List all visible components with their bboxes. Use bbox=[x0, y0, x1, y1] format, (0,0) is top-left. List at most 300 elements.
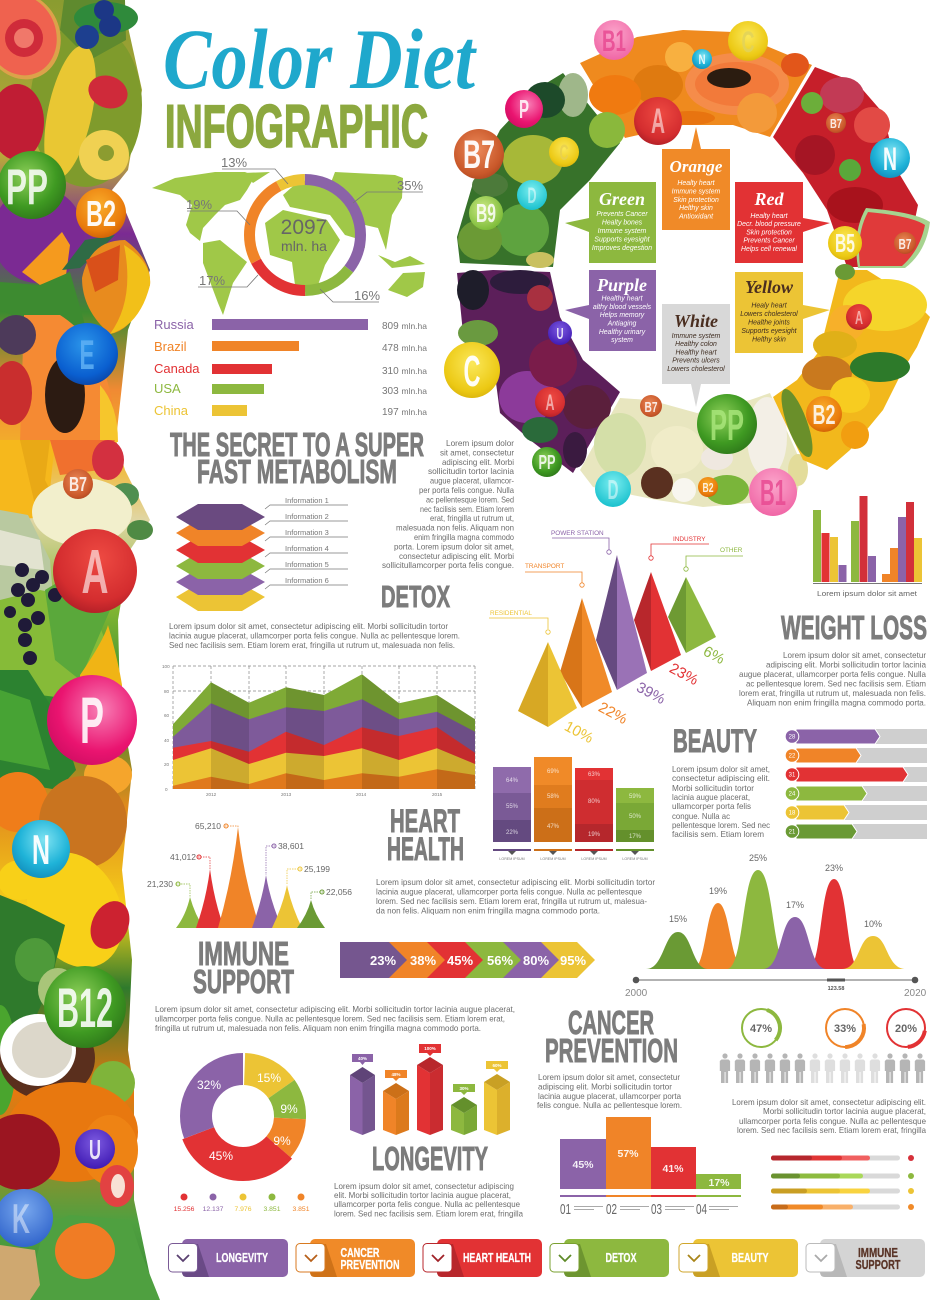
panel: yellow benefits: Helthy skin bbox=[752, 336, 786, 344]
triangle peak chart: 21,230 bbox=[147, 879, 173, 889]
heading: secret to fast metabolism: THE SECRET TO A SUPER bbox=[170, 426, 424, 463]
text block: weight loss: Aliquam non enim fringilla magna commodo porta. bbox=[747, 698, 926, 708]
text block: beauty: lacinia augue placerat, bbox=[672, 793, 750, 802]
text block: metabolism: sollicitudin tortor lacinia bbox=[428, 467, 514, 476]
beauty progress arrows: 28 bbox=[789, 734, 796, 740]
text block: longevity: elit. Morbi sollicitudin tortor lacinia augue placerat, bbox=[334, 1191, 511, 1200]
segmented progress bars bbox=[771, 1155, 914, 1210]
stacked bar chart: 19% bbox=[588, 832, 601, 838]
panel: purple benefits bbox=[565, 270, 656, 351]
triangle peak chart: 38,601 bbox=[278, 841, 304, 851]
area chart: 20 bbox=[164, 762, 170, 767]
vitamin U: U bbox=[89, 1134, 101, 1165]
world map with land ring: 2097 bbox=[281, 216, 327, 239]
panel: green benefits: Healty bones bbox=[602, 220, 643, 226]
text block: beauty: congue. Nulla ac bbox=[672, 812, 730, 821]
panel: yellow benefits bbox=[735, 272, 830, 353]
text block: cancer prevention: felis congue. Nulla ac pellentesque lorem. bbox=[537, 1101, 682, 1110]
vitamin balls on wheel bbox=[444, 20, 916, 516]
stacked bar chart: LOREM IPSUM bbox=[622, 857, 648, 861]
percent circles bbox=[737, 1004, 928, 1052]
panel: purple benefits: Healthy urinary bbox=[599, 329, 646, 336]
left fruit border bbox=[0, 0, 160, 1300]
step bar chart: 01 bbox=[560, 1201, 571, 1218]
donut chart: 9% bbox=[280, 1102, 298, 1116]
small column chart bbox=[813, 496, 922, 598]
land share ring bbox=[250, 180, 360, 290]
panel: orange benefits bbox=[662, 127, 730, 230]
isometric column chart: 40% bbox=[358, 1056, 367, 1061]
button: heart health: HEART HEALTH bbox=[463, 1251, 531, 1265]
panel: green benefits: Improves degestion bbox=[592, 245, 652, 252]
stacked bar chart: 63% bbox=[588, 772, 601, 778]
pyramid chart bbox=[489, 530, 743, 747]
bell curve chart: 25% bbox=[749, 853, 767, 863]
panel: yellow benefits: Supports eyesight bbox=[741, 328, 798, 335]
vitamin P: P bbox=[80, 683, 104, 757]
text block: heart health bbox=[376, 878, 655, 916]
text block: metabolism: enim fringilla magna commodo bbox=[414, 533, 514, 542]
panel: purple benefits: althy blood vessels bbox=[593, 304, 652, 311]
text block: detox: Lorem ipsum dolor sit amet, consectetur adipiscing elit. Morbi sollicitudin tortor bbox=[169, 622, 448, 631]
country bar chart: 809 mln.ha bbox=[382, 321, 427, 332]
text block: longevity: lorem. Sed nec facilisis sem. Etiam lorem erat, fringilla bbox=[334, 1210, 523, 1218]
text block: beauty: Morbi sollicitudin tortor bbox=[672, 784, 754, 793]
triangle peak chart: 41,012 bbox=[170, 852, 196, 862]
panel: red benefits bbox=[735, 182, 830, 263]
text block: people: Morbi sollicitudin tortor lacinia augue placerat, bbox=[763, 1107, 926, 1116]
text block: metabolism: consectetur adipiscing elit. Morbi bbox=[399, 552, 514, 561]
text block: cancer prevention: adipiscing elit. Morbi sollicitudin tortor bbox=[538, 1082, 672, 1092]
map continents bbox=[152, 172, 425, 315]
button: immune support bbox=[806, 1239, 925, 1277]
bell curve chart: 17% bbox=[786, 900, 804, 910]
vitamin A bbox=[53, 529, 137, 613]
text block: immune support: Lorem ipsum dolor sit amet, consectetur adipiscing elit. Morbi sollicitudin tortor lacinia augue placerat, bbox=[155, 1005, 515, 1014]
text block: longevity: Lorem ipsum dolor sit amet, consectetur adipiscing bbox=[334, 1182, 514, 1191]
panel: red benefits: Red bbox=[754, 189, 784, 209]
panel: yellow benefits: Healthe joints bbox=[748, 320, 790, 326]
triangle peak chart bbox=[147, 821, 352, 928]
world map with land ring: 16% bbox=[354, 288, 380, 303]
vitamin balls on wheel: A bbox=[651, 102, 665, 141]
panel: yellow benefits: Healy heart bbox=[751, 302, 788, 310]
panel: white benefits: Lowers cholesterol bbox=[667, 366, 725, 373]
panel: yellow benefits: Yellow bbox=[745, 277, 794, 297]
beauty progress arrows: 24 bbox=[789, 792, 796, 798]
step bar chart bbox=[560, 1117, 741, 1218]
vitamin P bbox=[47, 675, 137, 765]
panel: red benefits: Healty heart bbox=[750, 213, 789, 220]
pyramid chart: 39% bbox=[634, 679, 668, 708]
heading: cancer prevention: PREVENTION bbox=[545, 1032, 678, 1069]
sector: red foods bbox=[773, 67, 930, 268]
isometric column chart: 100% bbox=[424, 1046, 436, 1051]
area chart: 2014 bbox=[356, 792, 367, 797]
vitamin balls on wheel: B7 bbox=[898, 236, 912, 253]
bell curve chart: 23% bbox=[825, 863, 843, 873]
sector: purple foods bbox=[457, 270, 620, 473]
vitamin balls on wheel: PP bbox=[538, 452, 556, 474]
percentage arrow band bbox=[340, 942, 595, 978]
pyramid chart: RESIDENTIAL bbox=[490, 610, 532, 617]
vitamin balls on wheel: D bbox=[608, 474, 618, 505]
sector: orange foods bbox=[580, 30, 812, 138]
text block: immune support bbox=[155, 1005, 515, 1033]
text block: longevity: ullamcorper porta felis congue. Nulla ac pellentesque bbox=[334, 1200, 520, 1209]
country bar chart: 310 mln.ha bbox=[382, 366, 427, 377]
text block: heart health: lacinia augue placerat, ullamcorper porta felis congue. Nulla ac pellentesque bbox=[376, 888, 642, 896]
step bar chart: 57% bbox=[617, 1148, 639, 1160]
layered hexagon stack: Information 3 bbox=[285, 528, 329, 537]
panel: orange benefits: Helthy skin bbox=[679, 205, 713, 212]
vitamin B12: B12 bbox=[57, 976, 113, 1039]
donut chart bbox=[174, 1068, 310, 1213]
panel: red benefits: Skin protection bbox=[746, 230, 792, 236]
heading: cancer prevention bbox=[545, 1004, 678, 1069]
pyramid chart: INDUSTRY bbox=[673, 536, 706, 543]
text block: heart health: Lorem ipsum dolor sit amet, consectetur adipiscing elit. Morbi sollicitudin tortor bbox=[376, 878, 655, 887]
heading: secret to fast metabolism bbox=[170, 426, 424, 490]
vitamin A: A bbox=[82, 538, 108, 607]
beauty progress arrows bbox=[785, 729, 927, 839]
text block: immune support: fringilla ut rutrum ut, malesuada non felis. Aliquam non enim fringilla magna commodo porta. bbox=[155, 1024, 481, 1033]
vitamin balls on wheel: N bbox=[883, 141, 897, 177]
panel: green benefits: Prevents Cancer bbox=[596, 211, 648, 218]
area chart: 2013 bbox=[281, 792, 292, 797]
panel: purple benefits: Antiaging bbox=[607, 320, 637, 328]
vitamin balls on wheel: B2 bbox=[812, 399, 836, 430]
button: detox: DETOX bbox=[606, 1251, 637, 1265]
donut legend: 7.976 bbox=[234, 1206, 252, 1213]
button: heart health bbox=[423, 1239, 542, 1277]
heading: immune support bbox=[193, 935, 294, 1000]
bell curve chart: 2020 bbox=[904, 988, 927, 999]
vitamin balls on wheel: A bbox=[855, 308, 863, 328]
stacked bar chart: 47% bbox=[547, 824, 560, 830]
panel: orange benefits: Orange bbox=[670, 157, 723, 176]
heading: heart health bbox=[387, 803, 464, 867]
pyramid chart: 10% bbox=[562, 718, 596, 747]
vitamin N bbox=[12, 820, 70, 878]
pyramid callouts bbox=[489, 538, 743, 634]
panel: red benefits: Helps cell renewal bbox=[741, 246, 797, 253]
stacked bar chart bbox=[493, 757, 654, 861]
vitamin balls on wheel: N bbox=[698, 51, 706, 67]
percentage arrow band: 80% bbox=[523, 953, 549, 968]
donut chart: 9% bbox=[273, 1134, 291, 1148]
percentage arrow band: 95% bbox=[560, 953, 586, 968]
area chart: 2015 bbox=[432, 792, 443, 797]
people pictogram row bbox=[720, 1053, 925, 1083]
text block: metabolism: nec facilisis sem. Etiam lorem bbox=[420, 505, 514, 514]
vitamin N: N bbox=[32, 826, 50, 873]
sector: green foods bbox=[457, 73, 625, 268]
text block: beauty bbox=[672, 765, 770, 839]
vitamin balls on wheel: B9 bbox=[476, 198, 496, 228]
stacked bar chart: 55% bbox=[506, 804, 519, 810]
country bar chart bbox=[154, 317, 427, 418]
stacked bar chart: LOREM IPSUM bbox=[581, 857, 607, 861]
text block: metabolism: erat, fringilla ut rutrum ut, bbox=[430, 514, 514, 523]
text block: beauty: Lorem ipsum dolor sit amet, bbox=[672, 765, 770, 774]
panel: white benefits: Immune system bbox=[672, 333, 721, 340]
percent circles: 20% bbox=[895, 1023, 917, 1035]
vitamin B12 bbox=[44, 966, 126, 1048]
donut legend bbox=[174, 1194, 310, 1213]
text block: detox bbox=[169, 622, 460, 650]
layered hexagon stack bbox=[176, 496, 348, 611]
button: cancer prevention bbox=[296, 1239, 415, 1277]
text block: cancer prevention: lacinia augue placerat, ullamcorper porta bbox=[538, 1092, 681, 1101]
vitamin balls on wheel: D bbox=[528, 183, 536, 208]
panel: purple benefits: Healthy heart bbox=[602, 296, 644, 302]
layered hexagon stack: Information 4 bbox=[285, 544, 329, 553]
button: longevity: LONGEVITY bbox=[216, 1251, 268, 1265]
pyramid chart: POWER STATION bbox=[551, 530, 604, 537]
text block: weight loss: adipiscing elit. Morbi sollicitudin tortor lacinia bbox=[766, 660, 926, 670]
button: beauty bbox=[679, 1239, 798, 1277]
step bar chart: 03 bbox=[651, 1201, 662, 1218]
button: cancer prevention: CANCER bbox=[340, 1246, 380, 1260]
step bar chart: 17% bbox=[708, 1177, 730, 1189]
heading: secret to fast metabolism: FAST METABOLISM bbox=[197, 453, 397, 490]
bell curve chart: 15% bbox=[669, 914, 687, 924]
isometric column chart bbox=[350, 1044, 510, 1135]
title: Color Diet bbox=[163, 11, 478, 107]
text block: heart health: da non felis. Aliquam non enim fringilla magna commodo porta. bbox=[376, 906, 600, 916]
vitamin E bbox=[56, 323, 118, 385]
percent circles: 33% bbox=[834, 1023, 856, 1035]
button: detox bbox=[550, 1239, 669, 1277]
text block: weight loss: lorem erat, fringilla ut rutrum ut, malesuada non felis. bbox=[739, 689, 926, 698]
stacked bar chart: 17% bbox=[629, 834, 642, 840]
heading: immune support: IMMUNE bbox=[198, 935, 289, 972]
percentage arrow band: 45% bbox=[447, 953, 473, 968]
text block: beauty: pellentesque lorem. Sed nec bbox=[672, 821, 770, 830]
text block: metabolism: porta. Lorem ipsum dolor sit amet, bbox=[394, 542, 514, 551]
button: cancer prevention: PREVENTION bbox=[340, 1258, 400, 1272]
triangle peak chart: 65,210 bbox=[195, 821, 221, 831]
text block: people bbox=[732, 1098, 926, 1135]
area chart: 80 bbox=[164, 689, 170, 694]
panel: orange benefits: Skin protection bbox=[673, 197, 719, 204]
bell curve chart: 123.58 bbox=[828, 986, 844, 992]
vitamin balls on wheel: B1 bbox=[602, 25, 626, 58]
stacked bar chart: 58% bbox=[547, 794, 560, 800]
donut legend: 12.137 bbox=[203, 1206, 224, 1213]
country bar chart: 197 mln.ha bbox=[382, 407, 427, 418]
vitamin PP bbox=[0, 151, 66, 219]
vitamin balls on wheel: C bbox=[560, 140, 569, 165]
text block: people: Lorem ipsum dolor sit amet, consectetur adipiscing elit. bbox=[732, 1098, 926, 1107]
beauty progress arrows: 22 bbox=[789, 754, 796, 760]
text block: metabolism: ac pellentesque lorem. Sed bbox=[426, 495, 514, 504]
donut legend: 3.851 bbox=[292, 1206, 310, 1213]
text block: metabolism: sollicitullamcorper porta felis congue. bbox=[382, 561, 514, 570]
text block: metabolism: malesuada non felis. Aliquam non bbox=[396, 524, 514, 533]
panel: green benefits: Green bbox=[599, 189, 645, 209]
text block: metabolism: Lorem ipsum dolor bbox=[446, 439, 514, 448]
percentage arrow band: 23% bbox=[370, 953, 396, 968]
button: immune support: SUPPORT bbox=[856, 1258, 901, 1272]
country bar chart: Canada bbox=[154, 361, 200, 376]
panel: red benefits: Prevents Cancer bbox=[743, 238, 795, 244]
pyramid chart: 6% bbox=[700, 643, 727, 668]
text block: metabolism: adipiscing elit. Morbi bbox=[442, 458, 514, 467]
percentage arrow band: 38% bbox=[410, 953, 436, 968]
triangle peak chart: 25,199 bbox=[304, 864, 330, 874]
world map with land ring: 13% bbox=[221, 155, 247, 170]
heading: heart health: HEART bbox=[390, 803, 460, 839]
country bar chart: Russia bbox=[154, 317, 195, 332]
panel: green benefits bbox=[565, 182, 656, 263]
isometric column chart: 60% bbox=[492, 1063, 502, 1068]
vitamin balls on wheel: B7 bbox=[644, 399, 658, 416]
layered hexagon stack: Information 5 bbox=[285, 560, 329, 569]
heading: cancer prevention: CANCER bbox=[568, 1004, 654, 1041]
layered hexagon stack: Information 1 bbox=[285, 496, 329, 505]
stacked bar chart: 80% bbox=[588, 799, 601, 805]
text block: people: lorem. Sed nec facilisis sem. Etiam lorem erat, fringilla bbox=[737, 1126, 926, 1135]
stacked bar chart: 50% bbox=[629, 814, 642, 820]
donut chart: 15% bbox=[257, 1071, 281, 1085]
vitamin B2 bbox=[76, 188, 126, 238]
area chart: 0 bbox=[165, 787, 168, 792]
button: longevity bbox=[168, 1239, 288, 1277]
step bar chart: 41% bbox=[662, 1163, 684, 1175]
country bar chart: Brazil bbox=[154, 339, 187, 354]
pyramid chart: 22% bbox=[596, 699, 630, 728]
world map with land ring: 19% bbox=[186, 197, 212, 212]
layered hexagon stack: Information 6 bbox=[285, 576, 329, 585]
donut chart: 45% bbox=[209, 1149, 233, 1163]
vitamin balls on wheel: P bbox=[519, 94, 529, 124]
triangle peak chart: 22,056 bbox=[326, 887, 352, 897]
text block: longevity bbox=[334, 1182, 523, 1218]
text block: metabolism: augue placerat, ullamcor- bbox=[430, 477, 514, 486]
panel: green benefits: Immune system bbox=[598, 228, 647, 235]
button: immune support: IMMUNE bbox=[858, 1246, 898, 1260]
country bar chart: 303 mln.ha bbox=[382, 386, 427, 397]
text block: beauty: consectetur adipiscing elit. bbox=[672, 774, 770, 783]
vitamin balls on wheel: C bbox=[742, 26, 754, 59]
vitamin B2: B2 bbox=[86, 193, 116, 234]
panel: purple benefits: Helps memory bbox=[600, 312, 645, 319]
vitamin PP: PP bbox=[6, 159, 48, 215]
vitamin B7: B7 bbox=[69, 474, 87, 496]
panel: white benefits: Healthy heart bbox=[676, 350, 718, 356]
percentage arrow band: 56% bbox=[487, 953, 513, 968]
vitamin balls on wheel: U bbox=[556, 326, 564, 343]
world map with land ring bbox=[152, 155, 425, 315]
step bar chart: 04 bbox=[696, 1201, 707, 1218]
vitamin balls on wheel: C bbox=[464, 347, 480, 396]
text block: cancer prevention: Lorem ipsum dolor sit amet, consectetur bbox=[538, 1073, 680, 1082]
panel: red benefits: Decr. blood pressure bbox=[737, 221, 801, 228]
text block: heart health: lorem. Sed nec facilisis sem. Etiam lorem erat, fringilla ut rutrum ut, malesua- bbox=[376, 897, 647, 906]
vitamin balls on wheel: B2 bbox=[702, 480, 714, 495]
heading: longevity: LONGEVITY bbox=[372, 1140, 488, 1177]
area chart bbox=[162, 664, 475, 797]
ring callouts bbox=[187, 169, 423, 302]
vitamin balls on wheel: B7 bbox=[830, 116, 842, 131]
stacked bar chart: 69% bbox=[547, 769, 560, 775]
pyramid chart: 23% bbox=[667, 660, 701, 689]
percent circles: 47% bbox=[750, 1023, 772, 1035]
text block: metabolism bbox=[382, 439, 514, 570]
small column chart: Lorem ipsum dolor sit amet bbox=[817, 589, 918, 598]
panel: white benefits bbox=[662, 304, 730, 407]
panel: white benefits: Healthy colon bbox=[675, 341, 717, 348]
donut legend: 15.256 bbox=[174, 1206, 195, 1213]
vitamin B7 bbox=[63, 469, 93, 499]
text block: immune support: ullamcorper porta felis congue. Nulla ac pellentesque lorem. Sed nec facilisis sem. Etiam lorem erat, bbox=[155, 1014, 505, 1024]
donut legend: 3.851 bbox=[263, 1206, 281, 1213]
panel: orange benefits: Immune system bbox=[672, 188, 721, 196]
panel: white benefits: White bbox=[674, 311, 718, 331]
isometric column chart: 48% bbox=[391, 1072, 401, 1077]
country bar chart: USA bbox=[154, 381, 181, 396]
panel: green benefits: Supports eyesight bbox=[594, 236, 651, 244]
text block: weight loss: Lorem ipsum dolor sit amet, consectetur bbox=[783, 651, 926, 660]
heading: immune support: SUPPORT bbox=[193, 963, 294, 1000]
beauty progress arrows: 31 bbox=[789, 772, 796, 778]
donut chart: 32% bbox=[197, 1078, 221, 1092]
beauty progress arrows: 21 bbox=[789, 830, 796, 836]
vitamin balls on wheel: B1 bbox=[760, 472, 786, 513]
text block: weight loss: augue placerat, ullamcorper porta felis congue. Nulla bbox=[739, 670, 926, 679]
stacked bar chart: LOREM IPSUM bbox=[540, 857, 566, 861]
vitamin K: K bbox=[12, 1195, 30, 1242]
area chart: 40 bbox=[164, 738, 170, 743]
area chart: 60 bbox=[164, 713, 170, 718]
step bar chart: 02 bbox=[606, 1201, 617, 1218]
fruit wheel sectors bbox=[457, 30, 930, 507]
pyramid chart: OTHER bbox=[720, 547, 743, 554]
bell curve chart: 19% bbox=[709, 886, 727, 896]
sector: white foods bbox=[580, 393, 808, 507]
text block: metabolism: sit amet, consectetur bbox=[440, 448, 514, 457]
heading: detox: DETOX bbox=[381, 579, 450, 614]
text block: cancer prevention bbox=[537, 1073, 682, 1110]
vitamin E: E bbox=[80, 331, 94, 378]
title: INFOGRAPHIC bbox=[165, 93, 428, 160]
layered hexagon stack: Information 2 bbox=[285, 512, 329, 521]
country bar chart: 478 mln.ha bbox=[382, 343, 427, 354]
stacked bar chart: 59% bbox=[629, 794, 642, 800]
title bbox=[163, 11, 478, 160]
text block: beauty: facilisis sem. Etiam lorem bbox=[672, 830, 764, 839]
bell curve chart: 10% bbox=[864, 919, 882, 929]
vitamin balls on wheel: A bbox=[546, 390, 555, 415]
panel: purple benefits: system bbox=[611, 337, 633, 344]
panel: orange benefits: Healty heart bbox=[677, 180, 716, 187]
text block: metabolism: per porta felis congue. Nulla bbox=[419, 486, 514, 495]
area chart: 100 bbox=[162, 664, 170, 669]
text block: people: ullamcorper porta felis congue. Nulla ac pellentesque bbox=[739, 1117, 926, 1126]
heading: beauty: BEAUTY bbox=[673, 723, 757, 759]
area chart: 2012 bbox=[206, 792, 217, 797]
bell curve chart bbox=[625, 853, 927, 999]
panel: purple benefits: Purple bbox=[596, 275, 647, 295]
vitamin U bbox=[75, 1129, 115, 1169]
stacked bar chart: LOREM IPSUM bbox=[499, 857, 525, 861]
heading: heart health: HEALTH bbox=[387, 831, 464, 867]
world map with land ring: mln. ha bbox=[281, 238, 327, 254]
text block: weight loss: ac pellentesque lorem. Sed nec facilisis sem. Etiam bbox=[746, 680, 926, 688]
sector: yellow foods bbox=[773, 264, 930, 470]
